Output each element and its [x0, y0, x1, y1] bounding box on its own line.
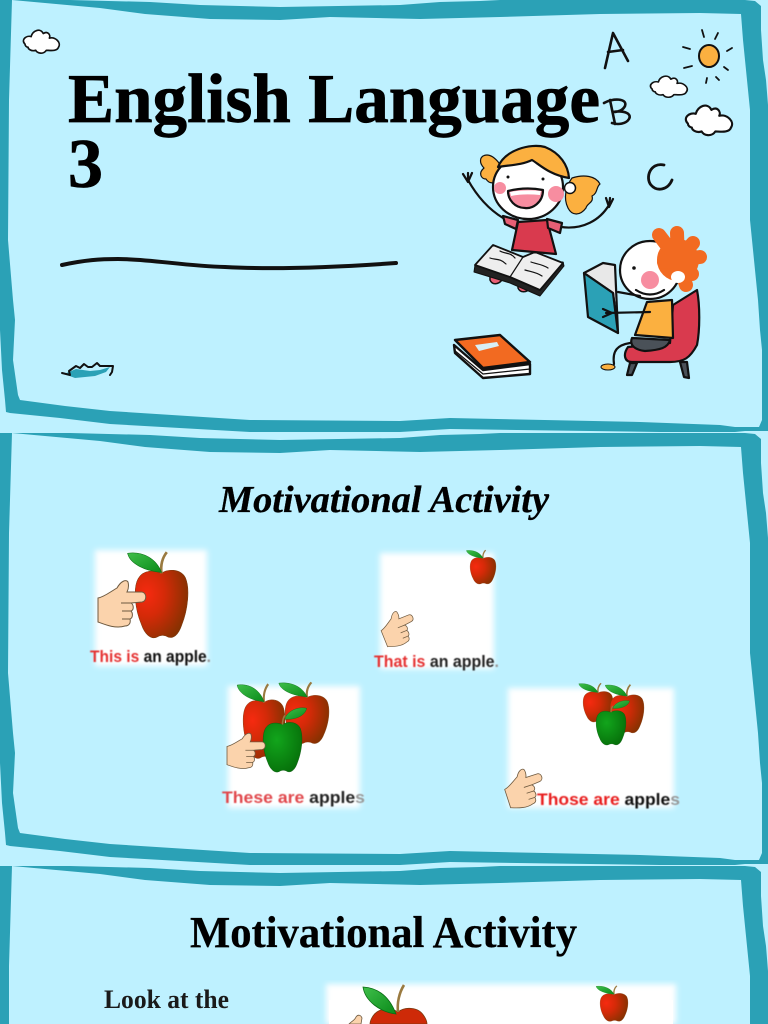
slide 3 text block: Look at the — [104, 985, 229, 1014]
girl eyes — [506, 176, 544, 180]
slide 3 frame: clipped to page — [0, 866, 768, 1024]
girl hair — [498, 146, 569, 178]
boy smile — [636, 290, 664, 294]
girl feet — [490, 270, 530, 292]
pointing hand, cropped at page edge — [349, 1015, 362, 1024]
slide 1 frame — [0, 0, 768, 432]
boy shirt — [635, 300, 673, 338]
boy arm — [603, 292, 650, 317]
boy cheek — [641, 271, 659, 289]
illustration: grass tuft — [62, 363, 113, 378]
chair back and seat — [625, 290, 699, 362]
illustration: closed books — [454, 335, 530, 378]
icon: medium cloud — [650, 76, 687, 97]
boy head — [620, 241, 680, 299]
boy hair — [658, 233, 700, 285]
icon: sun — [683, 30, 732, 83]
open book — [474, 262, 564, 296]
subtitle line — [62, 259, 396, 268]
illustration: girl reading — [463, 146, 613, 296]
boy leg — [614, 343, 630, 364]
panel: this is an apple: This is an apple. — [90, 647, 211, 666]
panel: those are apples — [500, 683, 680, 812]
letter B — [604, 100, 630, 124]
girl sleeves — [503, 216, 562, 233]
boy foot — [601, 364, 615, 370]
letter C — [649, 165, 672, 189]
panel: that is an apple: That is an apple. — [374, 652, 499, 671]
girl dress — [512, 220, 556, 254]
chair legs — [627, 362, 689, 378]
girl mouth — [508, 189, 543, 208]
illustration: boy reading on chair — [584, 233, 700, 378]
girl right pigtail — [565, 176, 600, 214]
boy ear — [671, 271, 685, 283]
slide 2 heading: Motivational Activity — [218, 479, 549, 521]
icon: large cloud — [686, 106, 732, 135]
panel: slide 3 apples — [326, 984, 676, 1024]
panel: this is an apple — [90, 550, 211, 666]
small apple — [596, 986, 628, 1021]
boy book pages — [584, 263, 618, 333]
boy eye — [632, 266, 636, 270]
girl left pigtail — [480, 155, 499, 183]
girl ear — [564, 182, 576, 194]
boy trousers — [631, 338, 670, 351]
large apple, cropped at page edge — [370, 1008, 427, 1024]
boy book cover — [584, 273, 618, 333]
girl head — [493, 155, 563, 219]
girl cheeks — [494, 182, 564, 202]
girl arms — [463, 173, 613, 228]
panel: those are apples: Those are apples — [537, 790, 680, 809]
panel: these are apples: These are apples — [222, 788, 365, 807]
icon: small cloud — [23, 30, 59, 53]
slide 2 frame — [0, 433, 768, 865]
panel: these are apples — [222, 682, 365, 808]
title number: 3 — [68, 126, 103, 203]
letter A — [605, 33, 628, 68]
title: English Language — [68, 61, 600, 138]
slide 3 heading: Motivational Activity — [190, 908, 577, 957]
panel: that is an apple — [374, 550, 499, 671]
